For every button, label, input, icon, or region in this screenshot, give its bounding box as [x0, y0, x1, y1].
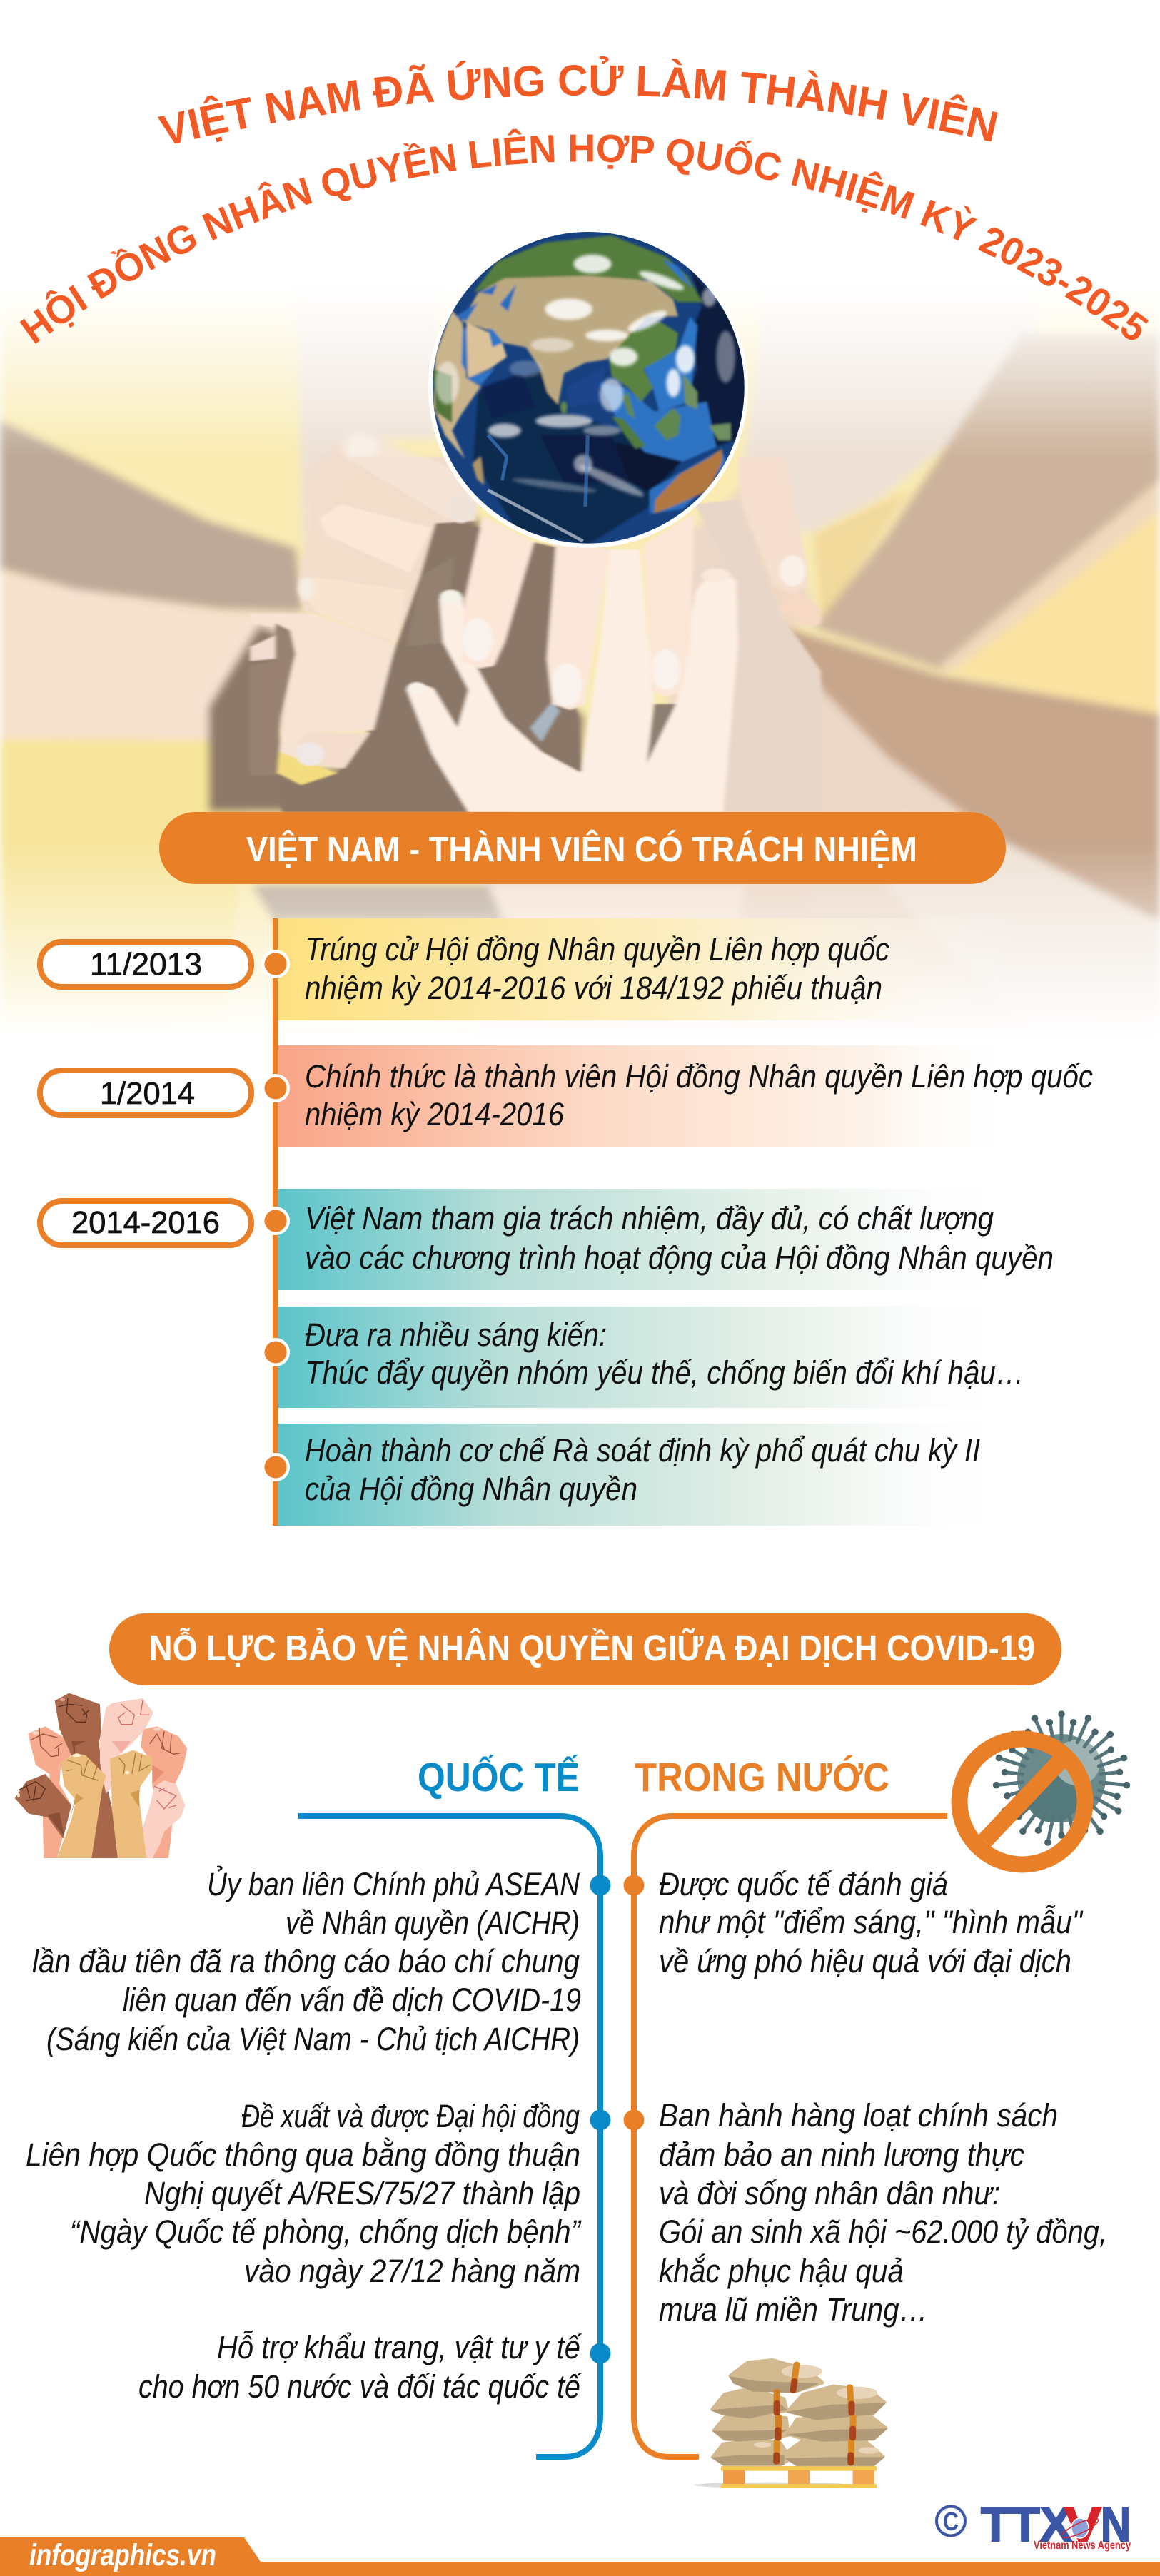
text block: international 2: Liên hợp Quốc thông qua bằng đồng thuận	[26, 2136, 580, 2173]
banner: Nỗ lực bảo vệ nhân quyền giữa đại dịch COVID-19: NỖ LỰC BẢO VỆ NHÂN QUYỀN GIỮA ĐẠI DỊCH COVID-19	[149, 1627, 1035, 1668]
text block: international 3: cho hơn 50 nước và đối tác quốc tế	[138, 2368, 582, 2405]
icon: raised fists	[15, 1693, 187, 1858]
heading: Quốc tế: QUỐC TẾ	[418, 1754, 580, 1800]
panel: row initiatives	[278, 1307, 1024, 1408]
text block: domestic 1: Được quốc tế đánh giá	[659, 1866, 948, 1902]
logo: TTXVN: Vietnam News Agency	[1034, 2540, 1131, 2552]
footer bar with site name	[0, 2537, 1160, 2576]
text block: international 1	[32, 1866, 581, 2057]
text block: international 1: Ủy ban liên Chính phủ ASEAN	[207, 1866, 580, 1902]
panel: row periodic review: của Hội đồng Nhân quyền	[305, 1471, 637, 1507]
panel: row 11/2013	[40, 918, 1020, 1020]
text block: international 1: về Nhân quyền (AICHR)	[286, 1905, 580, 1941]
icon: earth globe	[428, 228, 750, 548]
panel: row 1/2014: nhiệm kỳ 2014-2016	[305, 1096, 565, 1132]
text block: international 1: lần đầu tiên đã ra thông cáo báo chí chung	[32, 1943, 580, 1979]
panel: row initiatives: Đưa ra nhiều sáng kiến:	[305, 1317, 607, 1353]
icon: crossed-out virus	[959, 1714, 1126, 1865]
panel: row 2014-2016: Việt Nam tham gia trách nhiệm, đầy đủ, có chất lượng	[305, 1200, 994, 1237]
heading: Trong nước: TRONG NƯỚC	[635, 1755, 889, 1800]
logo: TTXVN: N	[1101, 2498, 1131, 2552]
blue bracket line with dots	[298, 1816, 611, 2457]
text block: domestic 2: Gói an sinh xã hội ~62.000 tỷ đồng,	[659, 2214, 1107, 2250]
panel: row 11/2013: nhiệm kỳ 2014-2016 với 184/192 phiếu thuận	[305, 970, 882, 1006]
panel: row 1/2014: Chính thức là thành viên Hội đồng Nhân quyền Liên hợp quốc	[305, 1058, 1093, 1095]
text block: international 2: Đề xuất và được Đại hội đồng	[241, 2098, 580, 2134]
text block: domestic 1: về ứng phó hiệu quả với đại dịch	[659, 1943, 1071, 1979]
orange bracket line with dots	[624, 1816, 947, 2457]
text block: international 3: Hỗ trợ khẩu trang, vật tư y tế	[217, 2329, 582, 2365]
text block: domestic 2: đảm bảo an ninh lương thực	[659, 2136, 1024, 2173]
footer bar with site name: infographics.vn	[29, 2538, 216, 2572]
text block: international 2: Nghị quyết A/RES/75/27 thành lập	[144, 2175, 580, 2211]
panel: row periodic review	[278, 1424, 1020, 1526]
banner: Việt Nam - thành viên có trách nhiệm: VIỆT NAM - THÀNH VIÊN CÓ TRÁCH NHIỆM	[246, 830, 917, 869]
text block: domestic 2	[659, 2097, 1107, 2328]
text block: international 2	[26, 2098, 582, 2289]
text block: domestic 2: khắc phục hậu quả	[659, 2253, 904, 2289]
panel: row 11/2013: Trúng cử Hội đồng Nhân quyền Liên hợp quốc	[305, 931, 889, 968]
logo: TTXVN	[937, 2498, 1131, 2552]
text block: international 3	[138, 2329, 582, 2405]
background photo: stacked hands	[0, 0, 1160, 1080]
timeline	[40, 918, 1093, 1526]
text block: domestic 2: mưa lũ miền Trung…	[659, 2291, 928, 2328]
panel: row 2014-2016: vào các chương trình hoạt động của Hội đồng Nhân quyền	[305, 1239, 1054, 1276]
banner: Việt Nam - thành viên có trách nhiệm	[159, 812, 1006, 884]
panel: row 1/2014: 1/2014	[100, 1076, 195, 1111]
icon: stacked rice sacks on pallet	[694, 2360, 888, 2488]
timeline dots	[261, 950, 290, 1481]
title: HỘI ĐỒNG NHÂN QUYỀN LIÊN HỢP QUỐC NHIỆM KỲ 2023-2025	[20, 128, 1149, 344]
banner: Nỗ lực bảo vệ nhân quyền giữa đại dịch COVID-19	[109, 1613, 1061, 1685]
text block: international 2: “Ngày Quốc tế phòng, chống dịch bệnh”	[70, 2214, 582, 2250]
panel: row 2014-2016	[40, 1189, 1054, 1290]
panel: row initiatives: Thúc đẩy quyền nhóm yếu thế, chống biến đổi khí hậu…	[305, 1354, 1024, 1391]
panel: row 1/2014	[40, 1045, 1093, 1147]
text block: domestic 1: như một "điểm sáng," "hình mẫu"	[659, 1904, 1084, 1940]
text block: domestic 2: và đời sống nhân dân như:	[659, 2175, 1000, 2211]
panel: row periodic review: Hoàn thành cơ chế Rà soát định kỳ phổ quát chu kỳ II	[305, 1432, 980, 1469]
text block: domestic 1	[659, 1866, 1084, 1979]
text block: international 2: vào ngày 27/12 hàng năm	[244, 2253, 580, 2289]
panel: row 2014-2016: 2014-2016	[71, 1205, 220, 1240]
logo: TTXVN: C	[943, 2507, 959, 2536]
text block: international 1: liên quan đến vấn đề dịch COVID-19	[123, 1982, 581, 2018]
logo: TTXVN: TTX	[981, 2498, 1072, 2552]
panel: row 11/2013: 11/2013	[90, 947, 202, 982]
text block: domestic 2: Ban hành hàng loạt chính sách	[659, 2097, 1058, 2134]
logo: TTXVN: V	[1064, 2498, 1101, 2552]
text block: international 1: (Sáng kiến của Việt Nam - Chủ tịch AICHR)	[46, 2021, 580, 2057]
title: VIỆT NAM ĐÃ ỨNG CỬ LÀM THÀNH VIÊN	[157, 56, 998, 144]
